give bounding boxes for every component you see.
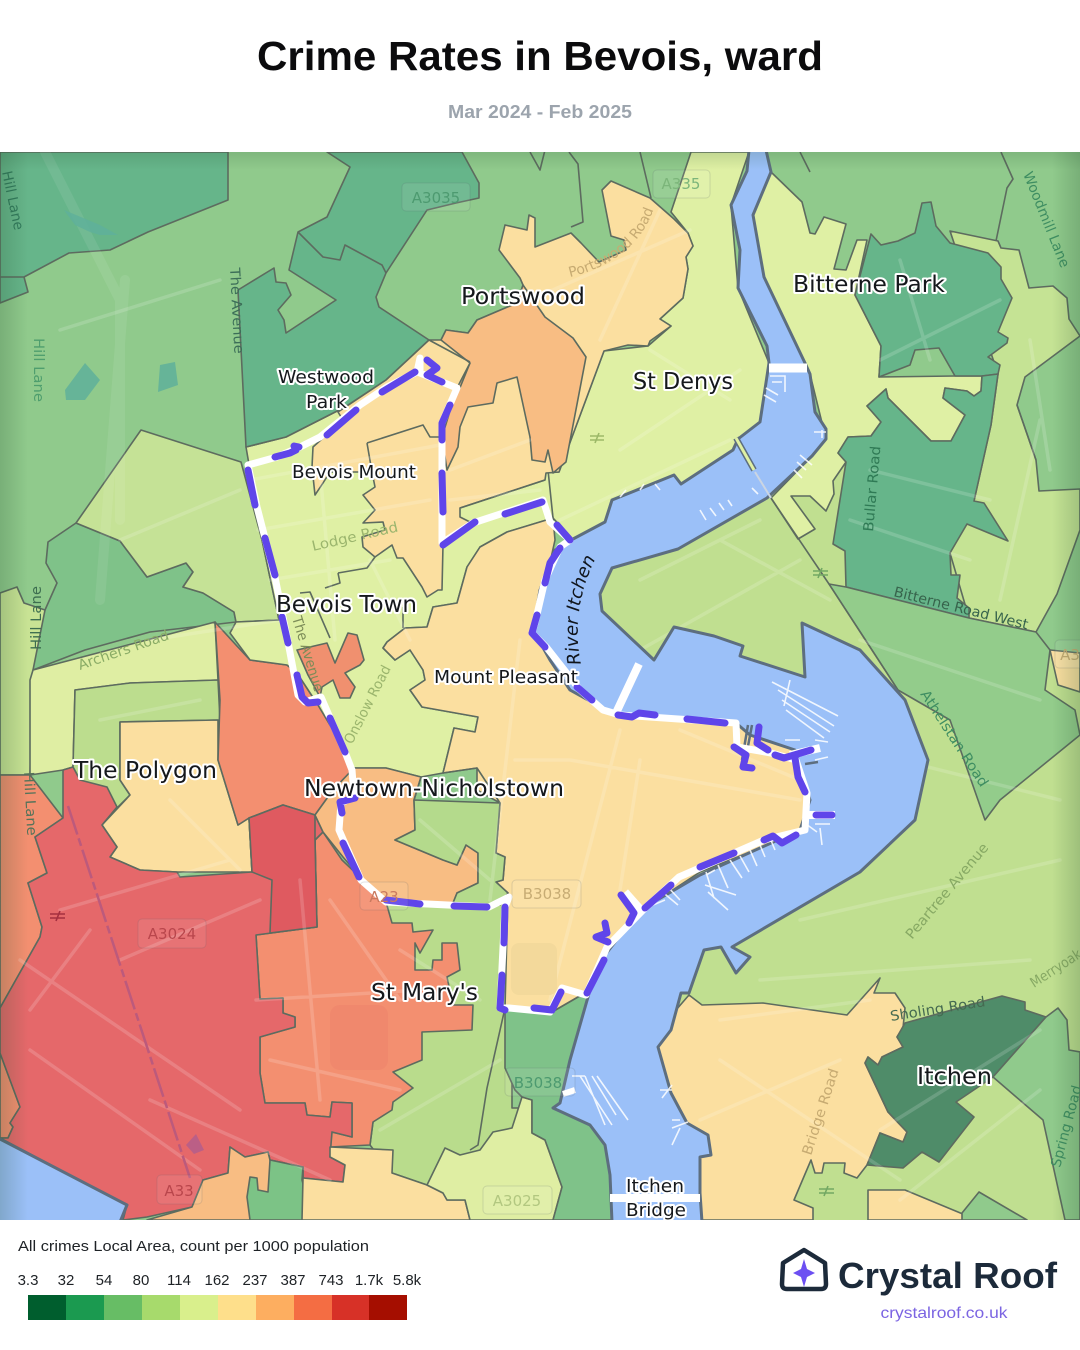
place labels: Itchen [626, 1176, 684, 1197]
road shield labels: B3038 [523, 885, 571, 903]
areas: crime rate polygons [0, 150, 1080, 1220]
place labels: Bevois Mount [292, 462, 416, 483]
legend values: 743 [318, 1272, 344, 1289]
road names: Hill Lane [29, 586, 45, 650]
road names: Lodge Road [310, 520, 400, 555]
road shield labels: A3025 [493, 1192, 541, 1210]
choropleth map [0, 152, 1080, 1220]
road names: Bridge Road [800, 1067, 843, 1157]
place labels: Westwood [278, 367, 374, 388]
legend values: 32 [58, 1272, 74, 1289]
road names: Archers Road [76, 628, 171, 674]
place labels: Newtown-Nicholstown [304, 776, 564, 802]
rail station symbols [50, 433, 834, 1196]
road names: Hill Lane [30, 338, 46, 402]
subtitle: date range: Mar 2024 - Feb 2025 [448, 102, 632, 122]
road shield labels: B3038 [514, 1074, 562, 1092]
place labels: St Mary's [371, 980, 478, 1006]
road names: Athelstan Road [917, 687, 991, 790]
road shield labels: A3 [1060, 646, 1080, 664]
road shield labels [148, 175, 1080, 1210]
pier on the river [736, 438, 771, 498]
place labels: Bitterne Park [793, 272, 946, 298]
parks and ponds [64, 210, 557, 1154]
legend values: 54 [96, 1272, 112, 1289]
legend values: 1.7k [355, 1272, 384, 1289]
road shield labels: A33 [164, 1182, 194, 1200]
place labels: Itchen [917, 1064, 992, 1090]
road names: The Avenue [288, 614, 326, 694]
ward boundary: purple dashes [248, 360, 832, 1010]
road names: Bullar Road [861, 445, 884, 532]
marinas and jetties [572, 376, 838, 1145]
road shields [138, 170, 1080, 1214]
title: Crime Rates in Bevois, ward [257, 33, 823, 79]
road names: Portswood Road [568, 207, 653, 277]
river Itchen water [0, 150, 928, 1222]
legend values: 114 [167, 1272, 191, 1289]
internal boundary lines [298, 150, 1036, 1150]
place labels: Mount Pleasant [434, 667, 578, 688]
road names: Hill Lane [20, 771, 39, 836]
icon: house with star [782, 1250, 826, 1289]
legend title: All crimes Local Area, count per 1000 population [18, 1238, 369, 1255]
legend values: 162 [204, 1272, 230, 1289]
place labels: St Denys [633, 369, 733, 395]
road names: The Avenue [226, 266, 246, 354]
bridges [563, 368, 807, 1198]
road names [2, 170, 1080, 1167]
legend [18, 1238, 422, 1320]
road names: Onslow Road [341, 663, 395, 747]
vignette [0, 152, 1080, 1220]
place labels: Bevois Town [276, 592, 417, 618]
place labels: Park [306, 392, 348, 413]
place labels: Bridge [626, 1200, 686, 1221]
logo: Crystal Roof [782, 1250, 1058, 1322]
legend values: 3.3 [18, 1272, 38, 1289]
label: River Itchen: River Itchen [564, 556, 594, 664]
place labels [73, 272, 992, 1221]
legend values: 387 [280, 1272, 306, 1289]
road shield labels: A3024 [148, 925, 196, 943]
logo wordmark: Crystal Roof [838, 1255, 1058, 1296]
road names: Peartree Avenue [903, 840, 992, 943]
road names: Sholing Road [889, 994, 986, 1025]
logo url: crystalroof.co.uk [880, 1305, 1009, 1322]
roads [20, 152, 1060, 1200]
road names: Bitterne Road West [892, 584, 1030, 633]
road names: Woodmill Lane [1019, 170, 1072, 270]
legend colour scale [28, 1295, 407, 1320]
road shield labels: A3035 [412, 189, 460, 207]
legend values [18, 1272, 422, 1289]
ward boundary: white casing [248, 358, 807, 1012]
legend values: 5.8k [393, 1272, 422, 1289]
ward boundary: white spurs [616, 664, 835, 910]
road shield labels: A23 [369, 888, 399, 906]
legend values: 237 [242, 1272, 268, 1289]
legend values: 80 [133, 1272, 149, 1289]
place labels: The Polygon [73, 758, 217, 784]
road shield labels: A335 [662, 175, 700, 193]
place labels: Portswood [461, 284, 585, 310]
